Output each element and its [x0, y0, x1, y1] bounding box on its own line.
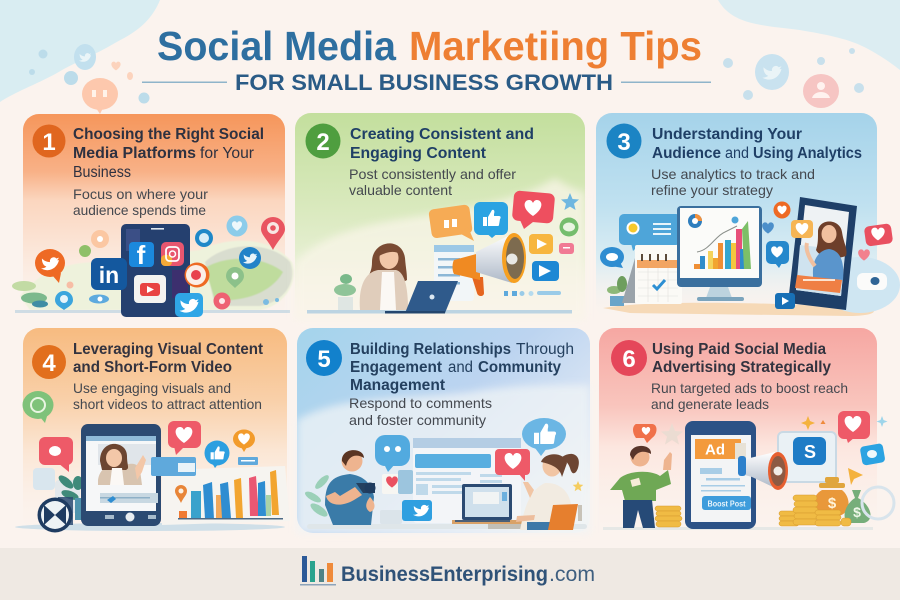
panel 5 description: and foster community	[349, 412, 486, 428]
illustration: tablet with video and chart	[15, 391, 290, 532]
icon: map pins and bubbles	[55, 216, 285, 310]
subtitle rule left	[142, 82, 227, 83]
panel 3 heading	[652, 126, 862, 162]
progress dots	[504, 291, 561, 296]
illustration: ad campaign and coins	[603, 411, 894, 530]
icon: stopwatch outline	[862, 487, 894, 519]
panel 5 heading: Management	[350, 377, 445, 394]
panel 3 heading: and	[725, 145, 749, 162]
panel 5 description: Respond to comments	[349, 395, 492, 411]
post lines	[700, 468, 745, 492]
icon: orange quote bubble	[428, 204, 474, 241]
panel 4: visual content	[15, 328, 290, 533]
title: blue words: Social Media	[157, 23, 397, 69]
bar chart	[694, 221, 751, 269]
icon: blue like bubble	[474, 202, 508, 238]
panel 4 background	[23, 328, 287, 533]
icon: sparkle stars	[801, 416, 888, 430]
panel 5 heading	[350, 341, 574, 394]
icon: coin stacks centre	[779, 495, 818, 526]
icon: instagram	[161, 242, 184, 266]
icon: linkedin	[91, 258, 127, 290]
man with camera	[325, 450, 376, 525]
panel 4 heading	[73, 341, 263, 376]
panel 6 heading: Advertising Strategically	[652, 359, 831, 376]
icon: yellow arrow	[848, 468, 863, 485]
icon: blue star	[561, 193, 579, 210]
panel 3: audience and analytics	[596, 113, 900, 320]
panel 4 description: Use engaging visuals and	[73, 380, 231, 396]
panel 5 light wash	[297, 385, 590, 533]
panel 4 description	[73, 380, 262, 412]
icon: heart bubble	[838, 411, 870, 443]
icon: green money bag	[845, 490, 871, 523]
megaphone	[738, 452, 788, 490]
panel 5 heading: Community	[478, 359, 561, 376]
panel 3 description: refine your strategy	[651, 182, 773, 198]
panel 4 description: short videos to attract attention	[73, 396, 262, 412]
plant	[57, 473, 89, 520]
icon: green bubble	[22, 391, 54, 423]
tablet	[81, 424, 161, 526]
panel 3 heading: Understanding Your	[652, 126, 802, 143]
panel 1 heading	[73, 126, 264, 181]
background blob: top right	[718, 0, 900, 70]
woman with ponytail	[516, 454, 582, 530]
subtitle rule right	[621, 82, 711, 83]
panel 2 description: valuable content	[349, 182, 452, 198]
footer band	[0, 548, 900, 600]
icon: orange twitter bubble	[35, 249, 65, 283]
icon: small blue heart	[762, 222, 774, 234]
illustration: analytics dashboard, calendar and creator phone	[600, 197, 900, 316]
icon: like bubble	[522, 418, 566, 456]
panel 3 number badge	[606, 124, 642, 158]
panel 5: relationships and community	[297, 328, 590, 533]
panel 1 heading: for Your	[200, 145, 254, 162]
panel 6 background	[599, 328, 877, 533]
woman	[360, 243, 408, 310]
icon: pink tile	[559, 243, 574, 254]
icon: small pale dots	[723, 48, 864, 100]
panel 5 heading: Engagement	[350, 359, 442, 376]
panel 6 heading	[652, 341, 831, 376]
panel 2 number badge	[306, 124, 340, 158]
icon: yellow star	[573, 481, 583, 491]
icon: yellow heart tile	[791, 220, 813, 238]
logo icon: bar chart	[300, 556, 336, 586]
panel 3 description: Use analytics to track and	[651, 166, 815, 182]
man pointing	[610, 446, 672, 528]
laptop	[385, 281, 458, 314]
icon: twitter circle	[755, 54, 789, 90]
icon: red bubble	[39, 437, 73, 472]
panel 2: consistent content	[295, 113, 585, 320]
panel 6 description: Run targeted ads to boost reach	[651, 380, 848, 396]
icon: facebook	[129, 240, 154, 270]
phone	[685, 421, 756, 529]
panel 6 heading: Using Paid Social Media	[652, 341, 826, 358]
icon: film reel	[38, 497, 73, 532]
icon: money bag	[814, 477, 849, 517]
panel 5 number badge	[306, 340, 342, 376]
panel 6 number badge	[611, 340, 647, 376]
icon: heart bubble	[168, 421, 201, 455]
browser window	[413, 438, 521, 523]
icon: twitter tile	[175, 293, 203, 317]
laptop	[455, 484, 512, 522]
icon: blue play tile	[532, 261, 559, 281]
icon: red heart bubble	[512, 190, 555, 229]
panel 1 heading: Media Platforms	[73, 145, 196, 162]
icon: yellow play tile	[529, 234, 553, 254]
panel 1 number badge: 1	[42, 129, 56, 156]
ground shadow	[15, 523, 285, 531]
icon: facebook: f	[137, 240, 146, 270]
icon: orange heart bubble	[774, 202, 790, 218]
social cards	[380, 470, 413, 524]
icon: coin stack left	[655, 506, 682, 527]
logo wordmark: BusinessEnterprising	[341, 562, 548, 586]
background blob: top left	[0, 0, 160, 102]
panel 5 background	[297, 328, 590, 533]
panel 6 number badge: 6	[622, 346, 636, 373]
phone with creator	[788, 197, 857, 310]
icon: blue bird bubble	[74, 44, 96, 70]
panel 5 heading: Building Relationships	[350, 341, 511, 358]
icon: white bubble	[857, 273, 887, 290]
chart panel	[151, 457, 290, 525]
icon: red heart tile	[864, 223, 893, 247]
plant	[334, 274, 356, 310]
right wash	[820, 257, 900, 313]
icon: red target	[184, 262, 210, 288]
monitor behind	[778, 432, 836, 482]
icon: money bag: $	[828, 495, 837, 512]
icon: blue heart tile	[766, 241, 789, 268]
panel 2 heading	[350, 126, 534, 162]
panel 4 heading: and Short-Form Video	[73, 359, 232, 376]
icon: green money bag: $	[853, 504, 861, 520]
screen panel	[434, 245, 474, 301]
icon: blue leaf tile	[860, 443, 886, 466]
ground shadow	[603, 303, 874, 316]
bar chart	[175, 470, 283, 520]
plant	[607, 276, 627, 306]
icon: youtube	[134, 275, 166, 303]
pale icon wash	[33, 468, 80, 513]
icon: small pink heart	[858, 249, 870, 261]
panel 2 light wash	[295, 178, 585, 320]
panel 2 background	[295, 113, 585, 320]
icon: peach hearts	[111, 62, 133, 80]
icon: orange heart bubble	[233, 430, 255, 452]
panel 6: paid advertising	[599, 328, 894, 533]
panel 3 number badge: 3	[617, 129, 631, 156]
panel 2 heading: Engaging Content	[350, 145, 486, 162]
calendar	[622, 245, 682, 304]
panel 4 number badge: 4	[42, 350, 56, 377]
panel 5 heading: Through	[516, 341, 574, 358]
illustration: people engaging online	[303, 418, 587, 530]
icon: blue bubble	[600, 247, 624, 268]
panel 4 heading: Leveraging Visual Content	[73, 341, 263, 358]
ad label	[695, 439, 746, 459]
logo wordmark: .com	[549, 562, 595, 586]
map blob	[20, 241, 294, 310]
phone	[121, 224, 190, 317]
title: orange words: Marketiing Tips	[409, 23, 702, 69]
panel 2 description: Post consistently and offer	[349, 166, 516, 182]
megaphone	[452, 233, 526, 296]
desk	[452, 520, 542, 529]
panel 5 description	[349, 395, 492, 428]
panel 3 heading: Audience	[652, 145, 721, 162]
icon: twitter tile	[402, 500, 432, 521]
subtitle: FOR SMALL BUSINESS GROWTH	[235, 70, 613, 95]
icon: orange heart bubble	[633, 424, 656, 443]
panel 1 description: audience spends time	[73, 202, 206, 218]
ground line	[15, 310, 290, 313]
panel 1 background	[23, 114, 285, 320]
panel 1: choosing platforms	[12, 114, 294, 320]
ad label: Ad	[705, 442, 725, 458]
title	[142, 23, 711, 95]
icon: linkedin: in	[99, 262, 119, 288]
panel 2 description	[349, 166, 516, 198]
icon: like circle	[204, 440, 230, 468]
blue info card	[619, 214, 681, 251]
panel 6 description	[651, 380, 848, 412]
panel 1 description	[73, 186, 208, 218]
boost button: Boost Post	[708, 500, 746, 508]
icon: red heart bubble	[495, 449, 530, 481]
icon: S bubble: S	[804, 442, 816, 462]
icon: star	[661, 423, 683, 444]
ground shadow	[603, 527, 873, 530]
monitor	[677, 206, 762, 301]
panel 1 number badge	[32, 124, 66, 158]
panel 3 description	[651, 166, 815, 198]
panel 5 number badge: 5	[317, 346, 331, 373]
panel 2 number badge: 2	[316, 129, 330, 156]
icon: blue chat bubble	[375, 435, 410, 472]
panel 3 heading: Using Analytics	[753, 145, 862, 162]
panel 1 heading: Choosing the Right Social	[73, 126, 264, 143]
ground shadow	[307, 524, 587, 529]
panel 2 heading: Creating Consistent and	[350, 126, 534, 143]
header decorative social icons	[29, 44, 864, 114]
panel 4 number badge	[32, 345, 66, 379]
icon: blue play tile	[775, 293, 795, 309]
illustration: woman with laptop and megaphone	[307, 190, 579, 314]
panel 1 description: Focus on where your	[73, 186, 208, 202]
panel 3 background	[596, 113, 877, 320]
ground shadow	[307, 310, 572, 314]
panel 6 description: and generate leads	[651, 396, 769, 412]
icon: peach quote bubble	[82, 78, 118, 114]
boost button	[702, 496, 751, 510]
icon: small blue drop bubbles	[29, 50, 150, 104]
icon: pink profile bubble	[803, 74, 839, 108]
plant	[303, 473, 331, 519]
footer logo	[300, 556, 595, 586]
icon: S bubble	[793, 437, 826, 465]
panel 5 heading: and	[448, 359, 473, 376]
plant	[12, 281, 48, 308]
illustration: social apps on phone over map	[12, 216, 294, 317]
panel 1 heading: Business	[73, 164, 131, 181]
icon: green heart circle	[560, 218, 578, 236]
icon: coin stack right	[815, 510, 851, 526]
